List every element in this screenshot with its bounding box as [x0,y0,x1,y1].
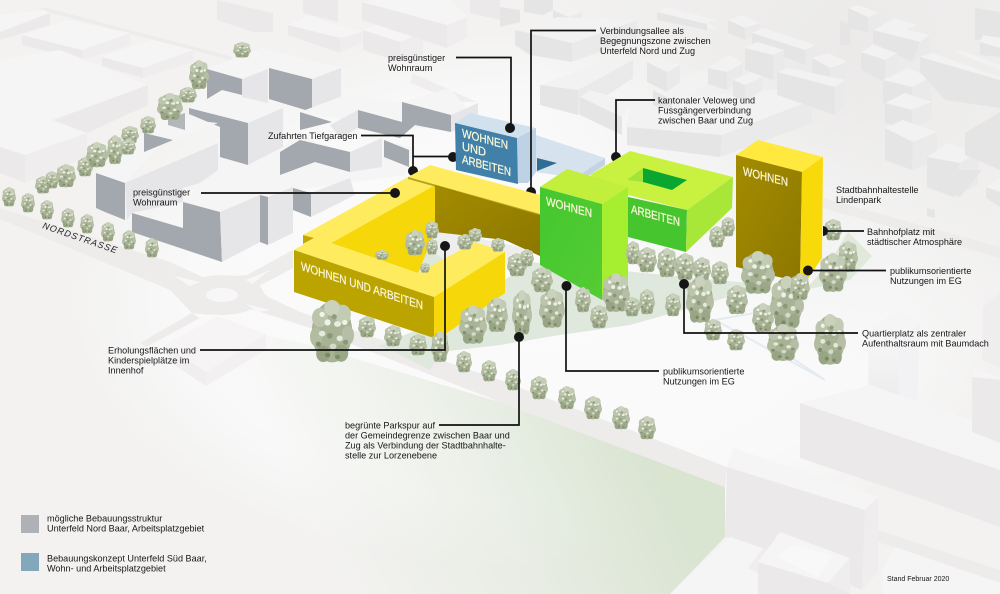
yellow block label: WOHNEN UND ARBEITEN [301,259,423,313]
green plaza ground [378,225,872,380]
legend text grey: mögliche Bebauungsstruktur [47,514,162,524]
label: publikumsorientierte Nutzungen right: publikumsorientierte [890,266,971,276]
label: Stadtbahnhaltestelle: Lindenpark [836,195,881,205]
legend text blue: Bebauungskonzept Unterfeld Süd Baar, [47,554,207,564]
label: publikumsorientierte Nutzungen centre: Nutzungen im EG [663,376,735,386]
label: Erholungsflächen: Kinderspielplätze im [108,356,189,366]
leader: kantonaler Veloweg [611,100,655,162]
blue block label: ARBEITEN [462,152,511,179]
pale building behind blue block [536,135,605,178]
label: publikumsorientierte Nutzungen right: Nutzungen im EG [890,276,962,286]
label: Bahnhofplatz: Bahnhofplatz mit [867,227,935,237]
background buildings top right [500,0,1000,218]
blue block label [462,126,511,179]
leader: preisgünstiger Wohnraum top [456,58,515,133]
label: publikumsorientierte Nutzungen centre: publikumsorientierte [663,366,744,376]
pale building near roundabout [165,316,266,386]
leader: begrünte Parkspur [439,332,524,425]
blue block label: WOHNEN [462,126,508,152]
tower label: WOHNEN [743,164,788,189]
label: begrünte Parkspur: Zug als Verbindung der Stadtbahnhalte- [345,440,506,450]
label: Zufahrten Tiefgaragen: Zufahrten Tiefgaragen [268,131,357,141]
legend swatch grey [21,515,39,533]
leader: Erholungsflächen [200,241,450,350]
green block label: WOHNEN [546,194,592,220]
green field [0,330,725,594]
legend [21,514,207,574]
blue block label: UND [462,139,486,159]
yellow tower: Wohnen [736,140,823,282]
legend text grey: Unterfeld Nord Baar, Arbeitsplatzgebiet [47,524,205,534]
leader: preisgünstiger Wohnraum left [201,188,400,198]
label: Verbindungsallee: Unterfeld Nord und Zug [600,46,695,56]
label: Quartierplatz: Aufenthaltsraum mit Baumdach [862,338,989,348]
label: preisgünstiger Wohnraum top: preisgünstiger [388,53,445,63]
green block: Wohnen [540,169,628,300]
label: Stadtbahnhaltestelle: Stadtbahnhaltestelle [836,185,918,195]
blue block: Wohnen und Arbeiten [455,113,536,184]
label: kantonaler Veloweg: zwischen Baar und Zug [658,116,753,126]
tall building [868,312,920,415]
date note: Stand Februar 2020 [887,576,949,583]
grey building cluster: Unterfeld Nord [96,48,478,262]
label: begrünte Parkspur: der Gemeindegrenze zwischen Baar und [345,430,510,440]
leader: publikumsorientierte Nutzungen right [803,266,886,276]
legend text blue: Wohn- und Arbeitsplatzgebiet [47,564,166,574]
label: preisgünstiger Wohnraum left: preisgünstiger [133,188,190,198]
label: kantonaler Veloweg: Fussgängerverbindung [658,106,751,116]
label: Erholungsflächen: Erholungsflächen und [108,346,196,356]
leader: Bahnhofplatz [823,226,864,236]
leader: Quartierplatz [679,279,858,333]
lime block label: ARBEITEN [631,202,680,229]
background buildings bottom right [670,292,1000,594]
street label: Nordstrasse: NORDSTRASSE [41,220,119,256]
label: Quartierplatz: Quartierplatz als zentraler [862,328,966,338]
label: preisgünstiger Wohnraum top: Wohnraum [388,63,432,73]
yellow block: Wohnen und Arbeiten [294,165,540,338]
leader: Zufahrten Tiefgaragen [361,136,458,176]
label: begrünte Parkspur: stelle zur Lorzenebene [345,450,437,460]
label: Verbindungsallee: Verbindungsallee als [600,26,684,36]
label: Erholungsflächen: Innenhof [108,366,144,376]
label: preisgünstiger Wohnraum left: Wohnraum [133,198,177,208]
label: kantonaler Veloweg: kantonaler Veloweg und [658,96,755,106]
leader: Verbindungsallee [526,30,596,197]
background buildings top left [0,0,500,183]
label: begrünte Parkspur: begrünte Parkspur auf [345,420,435,430]
leader: publikumsorientierte Nutzungen centre [562,281,659,371]
label: Bahnhofplatz: städtischer Atmosphäre [867,237,962,247]
lime block: Arbeiten [590,151,733,252]
label: Verbindungsallee: Begegnungszone zwischen [600,36,711,46]
trees [2,42,858,439]
legend swatch blue [21,553,39,571]
